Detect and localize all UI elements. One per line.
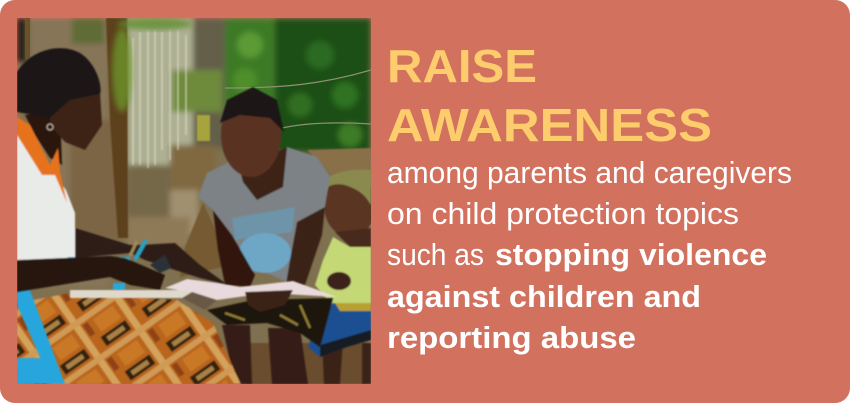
body line 5: reporting abuse [387, 320, 636, 355]
heading: RAISE AWARENESS [387, 40, 712, 151]
blue chair [17, 285, 65, 384]
child head [324, 184, 371, 232]
bracelets [135, 240, 146, 260]
wicker chair [180, 148, 371, 384]
heading line 1: RAISE [387, 40, 537, 92]
orange collar [17, 117, 67, 203]
seated mother [198, 87, 333, 384]
t-shirt print [232, 207, 295, 240]
photo: field worker reading with mother and child [17, 18, 376, 384]
photo background: garden and wall [17, 18, 371, 384]
worker upper arm [75, 228, 228, 285]
body line 2: on child protection topics [387, 196, 739, 231]
child hand [327, 272, 351, 290]
reed curtain streaks [133, 30, 186, 168]
barbed wire [225, 70, 371, 128]
field worker [17, 48, 228, 292]
mother legs [222, 325, 308, 384]
mother neck [240, 147, 287, 200]
blue chair back [68, 257, 130, 290]
child legs [322, 340, 371, 384]
earring [47, 124, 53, 130]
body line 3: such as [387, 237, 484, 272]
phone [150, 255, 171, 273]
body line 1: among parents and caregivers [387, 155, 792, 190]
child [308, 170, 376, 384]
patterned skirt [17, 293, 241, 384]
mother arms [213, 210, 255, 287]
child shirt [315, 237, 371, 303]
worker shirt [17, 133, 75, 262]
yellow container [197, 115, 210, 141]
green leaf blur [112, 28, 132, 112]
wooden post [106, 18, 128, 238]
worker lower arm [17, 256, 165, 292]
mother head [220, 114, 282, 178]
body text [387, 155, 792, 355]
body line 4: against children and [387, 279, 701, 314]
child skirt [308, 302, 371, 357]
mother hand on book [245, 290, 293, 312]
t-shirt [198, 147, 330, 282]
open book [70, 279, 337, 312]
mother skirt [207, 298, 333, 347]
worker hair [17, 48, 101, 118]
worker neck and face [25, 110, 62, 165]
heading line 2: AWARENESS [387, 99, 712, 151]
body line 3 bold: stopping violence [495, 237, 767, 272]
